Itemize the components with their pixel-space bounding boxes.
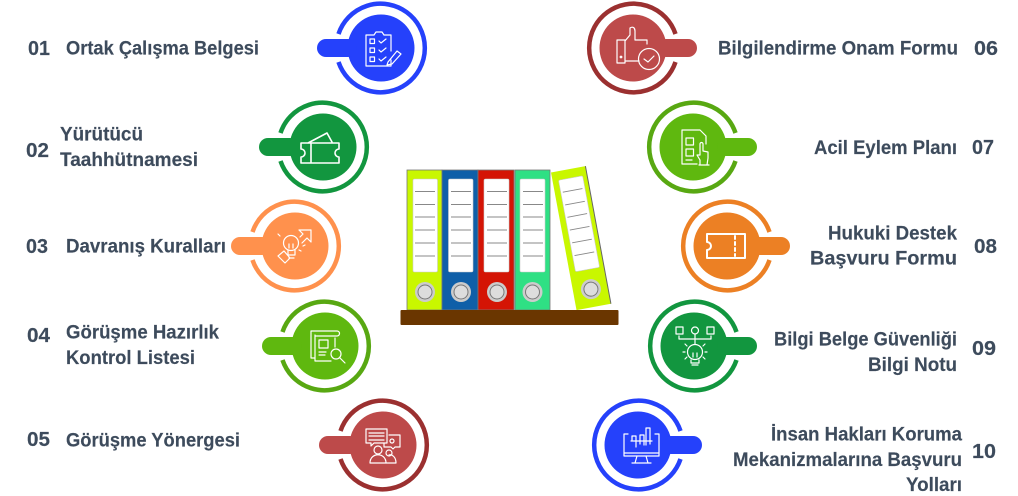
icon: ticket (707, 234, 745, 258)
label: Bilgi Belge Güvenliği Bilgi Notu: Bilgi Belge Güvenliği (774, 330, 957, 350)
item 08 (683, 202, 997, 290)
number 10: 10 (972, 440, 996, 463)
badge: lime green (649, 103, 757, 191)
shelf with binders (400, 166, 618, 325)
label: İnsan Hakları Koruma Mekanizmalarına Başvuru Yolları: Yolları (906, 475, 962, 496)
label: İnsan Hakları Koruma Mekanizmalarına Başvuru Yolları (733, 424, 962, 496)
number 08: 08 (974, 235, 997, 258)
label: İnsan Hakları Koruma Mekanizmalarına Başvuru Yolları: İnsan Hakları Koruma (771, 424, 962, 446)
binder: lime (407, 170, 442, 310)
label: Görüşme Hazırlık Kontrol Listesi: Kontrol Listesi (66, 348, 195, 369)
badge: green (650, 302, 757, 390)
number 06: 06 (974, 37, 998, 60)
item 02 (26, 103, 367, 191)
icon: form with pointing hand (682, 130, 709, 165)
label: Görüşme Hazırlık Kontrol Listesi (66, 322, 219, 369)
badge: red (319, 401, 427, 489)
number 01: 01 (28, 37, 50, 60)
label: Hukuki Destek Başvuru Formu: Hukuki Destek (828, 224, 957, 244)
number 09: 09 (972, 337, 996, 360)
icon: speech bubbles and people (366, 429, 400, 463)
number 03: 03 (26, 235, 48, 258)
badge: light orange (231, 202, 339, 290)
label: Acil Eylem Planı: Acil Eylem Planı (814, 138, 957, 159)
label: Bilgi Belge Güvenliği Bilgi Notu (774, 330, 957, 376)
number 07: 07 (972, 136, 994, 159)
item 09 (650, 302, 996, 390)
label: Yürütücü Taahhütnamesi: Yürütücü (60, 124, 143, 146)
icon: tickets (301, 133, 339, 163)
label: Ortak Çalışma Belgesi: Ortak Çalışma Belgesi (66, 38, 259, 60)
number 05: 05 (27, 428, 50, 451)
binder: blue (442, 170, 478, 310)
item 05 (27, 401, 427, 489)
item 04 (27, 302, 369, 390)
icon: thumbs up with check (617, 27, 660, 70)
item 06 (589, 4, 998, 92)
label: Yürütücü Taahhütnamesi (60, 124, 198, 171)
icon: checklist clipboard (366, 32, 401, 66)
label: Hukuki Destek Başvuru Formu: Başvuru Formu (810, 248, 957, 270)
binder: red (478, 170, 514, 310)
badge: orange (683, 202, 790, 290)
icon: document with magnifier (311, 331, 345, 363)
label: Yürütücü Taahhütnamesi: Taahhütnamesi (60, 150, 198, 171)
item 07 (649, 103, 994, 191)
item 10 (594, 401, 996, 496)
binder: tilted lime (551, 166, 611, 310)
label: Bilgi Belge Güvenliği Bilgi Notu: Bilgi Notu (868, 355, 957, 376)
label: İnsan Hakları Koruma Mekanizmalarına Başvuru Yolları: Mekanizmalarına Başvuru (733, 450, 962, 471)
label: Görüşme Hazırlık Kontrol Listesi: Görüşme Hazırlık (66, 322, 219, 344)
badge: lime green (262, 302, 369, 390)
badge: green (259, 103, 367, 191)
icon: flow diagram with bulb (676, 327, 714, 365)
badge: blue (317, 4, 425, 92)
icon: light bulb with arrow (278, 230, 311, 263)
item 03 (26, 202, 339, 290)
label: Bilgilendirme Onam Formu: Bilgilendirme Onam Formu (718, 38, 958, 60)
binder: green (515, 170, 550, 310)
badge: blue (594, 401, 702, 489)
number 02: 02 (26, 139, 49, 162)
label: Hukuki Destek Başvuru Formu (810, 224, 957, 270)
badge: dark red (589, 4, 697, 92)
number 04: 04 (27, 324, 51, 347)
icon: monitor with chart (624, 428, 659, 463)
label: Davranış Kuralları: Davranış Kuralları (66, 236, 226, 258)
item 01 (28, 4, 425, 92)
shelf (400, 310, 618, 325)
label: Görüşme Yönergesi: Görüşme Yönergesi (66, 430, 240, 452)
